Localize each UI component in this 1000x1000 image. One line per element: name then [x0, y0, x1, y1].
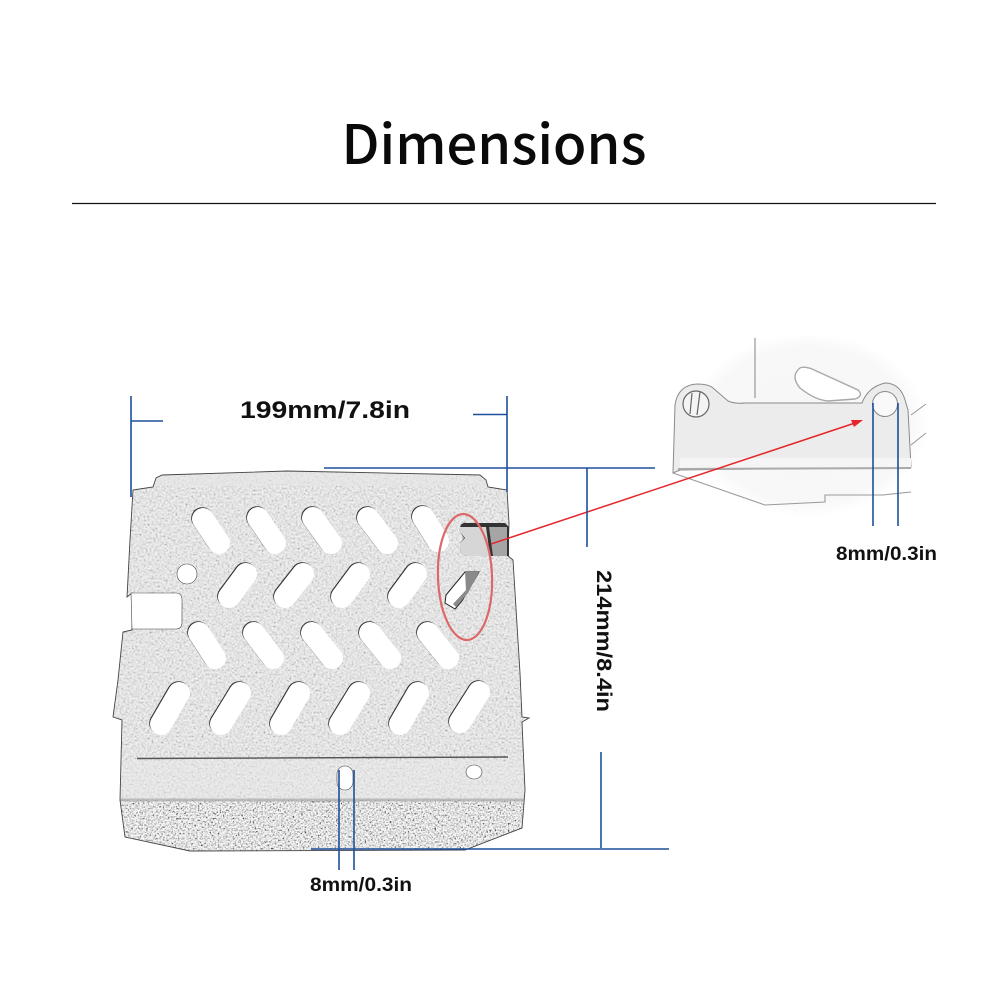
highlight ellipse — [436, 513, 494, 641]
slot width label: 8mm/0.3in — [310, 875, 412, 896]
inset lower edge — [673, 473, 911, 505]
red pointer arrow — [491, 420, 863, 544]
inset bracket — [673, 383, 911, 473]
width label: 199mm/7.8in — [240, 397, 410, 424]
metal plate — [105, 465, 535, 860]
height label: 214mm/8.4in — [592, 570, 615, 712]
title rule — [72, 202, 936, 204]
title: Dimensions — [342, 101, 646, 180]
slot shadows — [160, 516, 478, 723]
inset detail — [673, 333, 928, 517]
inset hole width label: 8mm/0.3in — [836, 544, 937, 565]
inset slot — [795, 367, 860, 401]
notch and bent tab — [445, 523, 509, 609]
holes and cutout — [131, 564, 482, 790]
slots — [161, 517, 479, 724]
inset background disc — [688, 333, 928, 517]
dimension lines — [131, 396, 898, 870]
